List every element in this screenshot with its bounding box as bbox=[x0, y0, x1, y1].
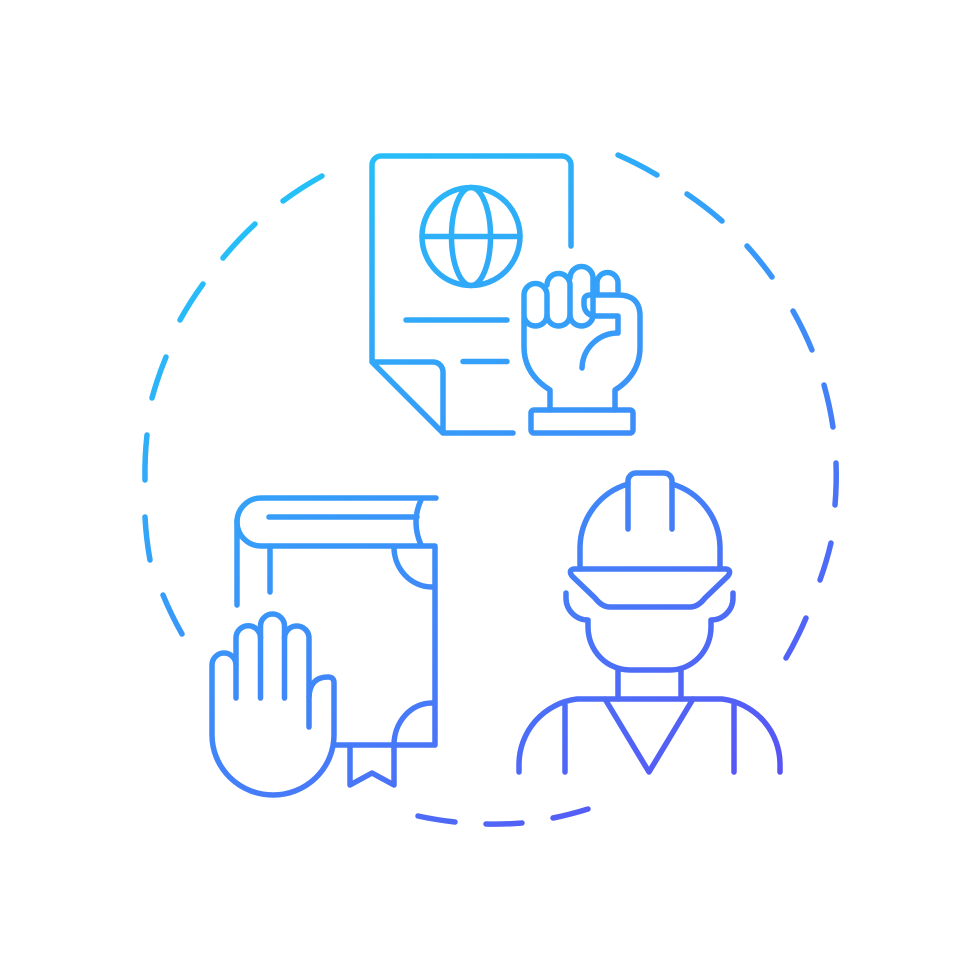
page lines bbox=[269, 500, 421, 545]
face and ears bbox=[566, 593, 733, 670]
icon: raised open hand bbox=[212, 614, 334, 795]
book cover bbox=[237, 498, 436, 745]
bookmark ribbon bbox=[350, 745, 394, 785]
icon: book bbox=[237, 498, 436, 785]
icon: globe bbox=[422, 188, 520, 286]
neck bbox=[618, 669, 681, 699]
icon: construction worker bbox=[519, 473, 780, 772]
icon: document with globe bbox=[372, 156, 571, 433]
dashed circle bbox=[145, 155, 836, 824]
document outline with folded corner bbox=[372, 156, 571, 433]
icon: raised fist bbox=[524, 266, 640, 433]
text lines bbox=[406, 320, 507, 362]
spine edges bbox=[237, 520, 270, 605]
shoulders and vest bbox=[519, 699, 780, 772]
corner protectors bbox=[394, 546, 432, 745]
hard hat bbox=[580, 484, 720, 569]
